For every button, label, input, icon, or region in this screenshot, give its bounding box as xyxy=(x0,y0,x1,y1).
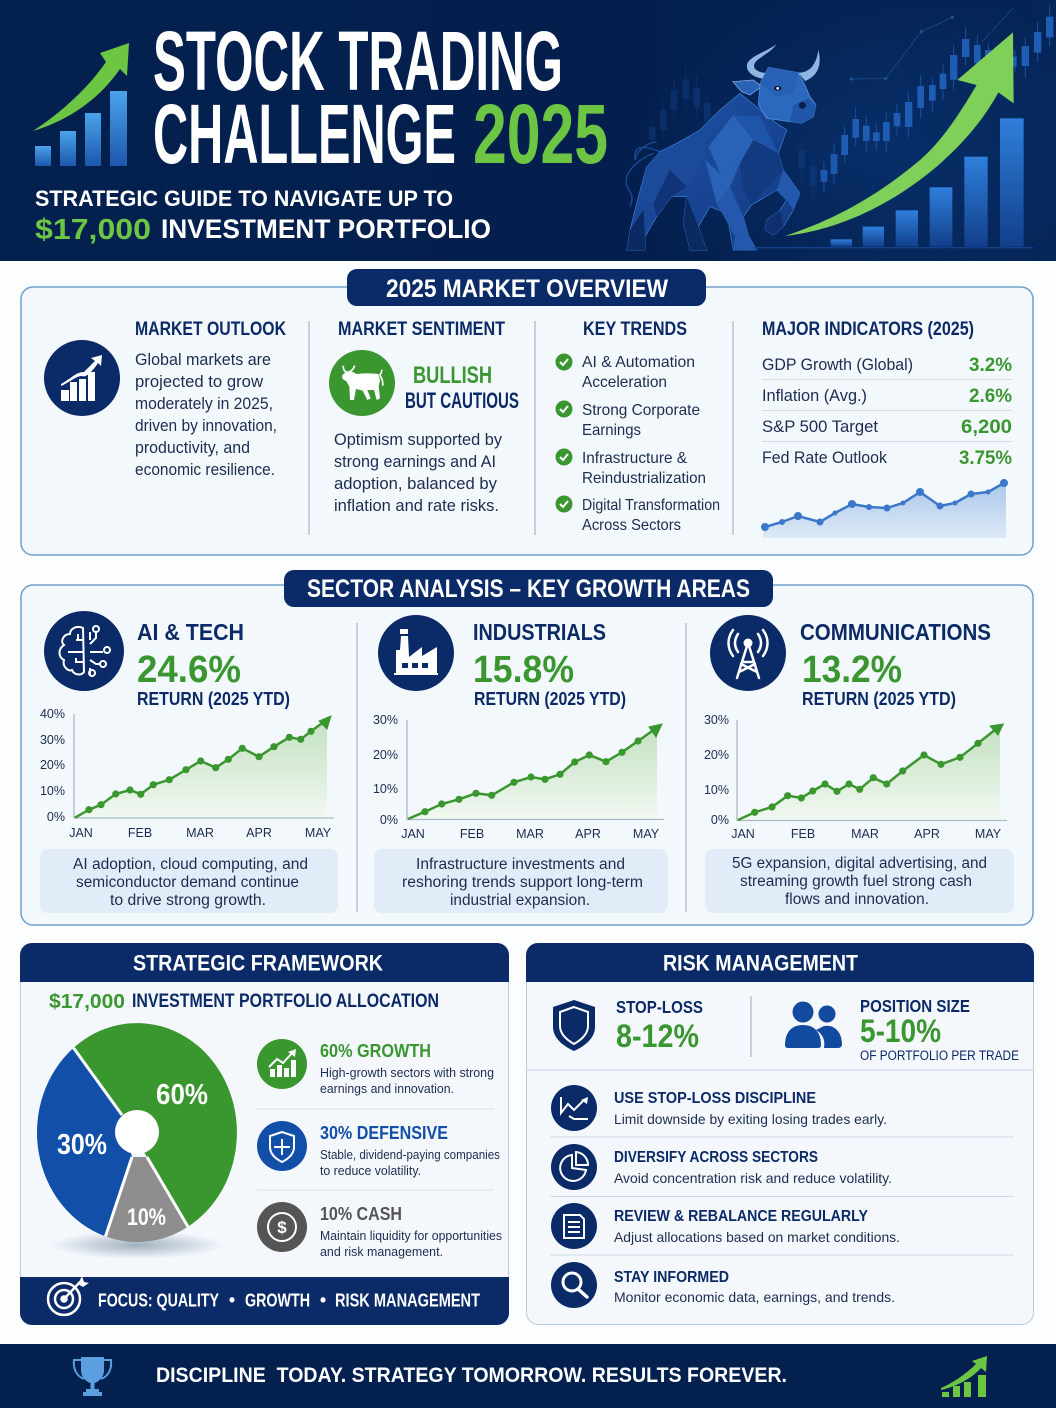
text: market outlook body: projected to grow xyxy=(135,373,263,391)
text: market outlook body: productivity, and xyxy=(135,439,250,457)
note: communications: 5G expansion, digital advertising, and xyxy=(732,855,987,872)
chart: allocation pie: 10% xyxy=(127,1204,166,1231)
chart: communications returns: 0% xyxy=(711,813,729,827)
legend: defensive xyxy=(257,1121,500,1178)
list: key trends checks xyxy=(556,354,572,512)
tip: stay informed: Monitor economic data, earnings, and trends. xyxy=(614,1289,895,1305)
stat: position size: OF PORTFOLIO PER TRADE xyxy=(860,1048,1019,1063)
panel: sector analysis xyxy=(21,570,1033,925)
background candlestick chart xyxy=(649,5,1053,198)
table: indicator rows: GDP Growth (Global) xyxy=(762,355,913,374)
text: market outlook body: driven by innovation, xyxy=(135,417,277,435)
column: key trends xyxy=(556,319,720,534)
sector: industrials: INDUSTRIALS xyxy=(473,619,606,645)
footer banner xyxy=(0,1344,1056,1408)
subheading: portfolio allocation xyxy=(49,991,439,1013)
text: market outlook body: economic resilience. xyxy=(135,461,275,479)
focus bar: RISK MANAGEMENT xyxy=(335,1290,480,1310)
note: communications: flows and innovation. xyxy=(785,891,929,908)
chart: industrials returns: JAN xyxy=(401,827,425,841)
sector: AI and tech xyxy=(40,611,338,913)
column: major indicators xyxy=(761,319,1012,538)
text: market sentiment body: Optimism supported by xyxy=(334,431,503,449)
stat: position size: 5-10% xyxy=(860,1013,941,1049)
sector: industrials: 15.8% xyxy=(473,649,574,691)
icon: signal tower xyxy=(710,615,786,691)
subtitle: STRATEGIC GUIDE TO NAVIGATE UP TO xyxy=(35,186,453,211)
title: STOCK TRADING xyxy=(153,14,563,108)
chart: communications returns: APR xyxy=(914,827,940,841)
chart: communications returns: MAR xyxy=(851,827,879,841)
text: market sentiment body xyxy=(334,431,503,515)
table: indicator rows xyxy=(762,354,1012,469)
slice: cash 10% xyxy=(106,1157,188,1242)
text: market outlook body: moderately in 2025, xyxy=(135,395,273,413)
stat: position size xyxy=(785,996,1019,1063)
tip: diversify across sectors: Avoid concentration risk and reduce volatility. xyxy=(614,1170,892,1186)
column: market sentiment: BUT CAUTIOUS xyxy=(405,388,519,413)
legend: defensive: to reduce volatility. xyxy=(320,1163,421,1178)
sector: communications xyxy=(704,615,1014,913)
text: key trends list: Strong Corporate xyxy=(582,402,700,419)
table: indicator rows: S&P 500 Target xyxy=(762,417,878,436)
text: key trends list: Infrastructure & xyxy=(582,450,687,467)
title: 2025 xyxy=(473,87,608,181)
header banner xyxy=(0,0,1056,261)
text: market outlook body xyxy=(135,351,277,479)
text: key trends list: AI & Automation xyxy=(582,354,695,371)
chart: AI and tech returns: 0% xyxy=(47,810,65,824)
icon: mini growth chart xyxy=(941,1356,987,1397)
subheading: portfolio allocation: $17,000 xyxy=(49,991,125,1013)
chart: industrials returns: FEB xyxy=(460,827,484,841)
column: market sentiment: MARKET SENTIMENT xyxy=(338,319,505,340)
sector: industrials: RETURN (2025 YTD) xyxy=(474,689,626,709)
stat: stop-loss xyxy=(553,997,703,1054)
subheading: portfolio allocation: INVESTMENT PORTFOLIO ALLOCATION xyxy=(132,991,439,1012)
slice: growth 60% xyxy=(74,1023,237,1227)
tip: use stop-loss discipline: USE STOP-LOSS DISCIPLINE xyxy=(614,1090,816,1107)
chart: communications returns xyxy=(704,713,1007,841)
chart: indicator sparkline xyxy=(761,479,1008,538)
chart: AI and tech returns: 20% xyxy=(40,758,65,772)
chart: communications returns: 10% xyxy=(704,783,729,797)
chart: AI and tech returns: MAR xyxy=(186,826,214,840)
text: key trends list: Earnings xyxy=(582,422,641,439)
title: CHALLENGE xyxy=(153,87,456,181)
text: key trends list: Digital Transformation xyxy=(582,497,720,514)
tip: stay informed xyxy=(551,1262,895,1308)
slice: defensive 30% xyxy=(37,1048,132,1236)
icon: magnifier xyxy=(551,1262,597,1308)
chart: communications returns: 30% xyxy=(704,713,729,727)
table: indicator rows: 3.75% xyxy=(959,447,1012,469)
note: industrials xyxy=(374,849,668,913)
text: key trends list: Across Sectors xyxy=(582,517,681,534)
heading tab: sector analysis xyxy=(284,570,773,607)
note: AI and tech: semiconductor demand continue xyxy=(76,874,299,891)
icon: people xyxy=(785,1002,842,1048)
icon: shield xyxy=(553,1000,595,1051)
heading: risk management xyxy=(526,943,1034,982)
heading tab: 2025 market overview: 2025 MARKET OVERVIEW xyxy=(386,275,668,303)
chart: AI and tech returns: 30% xyxy=(40,733,65,747)
icon: dollar coin badge xyxy=(257,1202,307,1252)
note: AI and tech xyxy=(40,849,338,913)
legend: defensive: Stable, dividend-paying companies xyxy=(320,1147,500,1162)
text: key trends list xyxy=(582,354,720,534)
icon: shield plus badge xyxy=(257,1121,307,1171)
column: market outlook: MARKET OUTLOOK xyxy=(135,319,286,340)
heading: risk management: RISK MANAGEMENT xyxy=(663,950,858,976)
tip: diversify across sectors: DIVERSIFY ACROSS SECTORS xyxy=(614,1149,818,1166)
note: industrials: industrial expansion. xyxy=(450,892,590,909)
icon: blue low-poly bull xyxy=(626,44,820,250)
footer banner: DISCIPLINE TODAY. STRATEGY TOMORROW. RESULTS FOREVER. xyxy=(156,1364,787,1387)
icon: pie chart xyxy=(551,1144,597,1190)
table: indicator rows: 3.2% xyxy=(969,354,1012,376)
chart: AI and tech returns: FEB xyxy=(128,826,152,840)
tip: review and rebalance xyxy=(551,1203,900,1249)
sector: AI and tech: 24.6% xyxy=(137,649,241,691)
tip: use stop-loss discipline: Limit downside by exiting losing trades early. xyxy=(614,1111,887,1127)
chart: industrials returns: 20% xyxy=(373,748,398,762)
sector: communications: RETURN (2025 YTD) xyxy=(802,689,956,709)
heading: strategic framework xyxy=(20,943,509,982)
stat: stop-loss: 8-12% xyxy=(616,1018,699,1054)
chart: AI and tech returns: APR xyxy=(246,826,272,840)
focus bar: FOCUS: QUALITY xyxy=(98,1290,219,1310)
chart: AI and tech returns: 40% xyxy=(40,707,65,721)
chart: AI and tech returns: JAN xyxy=(69,826,93,840)
chart: allocation pie: 30% xyxy=(57,1129,107,1161)
note: communications: streaming growth fuel strong cash xyxy=(740,873,972,890)
focus bar xyxy=(20,1276,509,1325)
chart: allocation pie xyxy=(37,1023,237,1259)
text: key trends list: Acceleration xyxy=(582,374,667,391)
note: AI and tech: AI adoption, cloud computing, and xyxy=(73,856,308,873)
title xyxy=(153,14,608,181)
sector: AI and tech: RETURN (2025 YTD) xyxy=(137,689,290,709)
icon: bull badge xyxy=(329,350,395,416)
chart: communications returns: MAY xyxy=(975,827,1002,841)
text: market sentiment body: inflation and rate risks. xyxy=(334,497,499,515)
legend: growth xyxy=(257,1039,494,1096)
sector: industrials xyxy=(373,615,668,913)
chart: industrials returns: MAY xyxy=(633,827,660,841)
chart: industrials returns: 30% xyxy=(373,713,398,727)
column: key trends: KEY TRENDS xyxy=(583,319,687,340)
chart: industrials returns: MAR xyxy=(516,827,544,841)
icon: factory xyxy=(378,615,454,691)
chart: communications returns: JAN xyxy=(731,827,755,841)
chart: industrials returns: 0% xyxy=(380,813,398,827)
chart: industrials returns: 10% xyxy=(373,782,398,796)
column: market outlook xyxy=(44,319,286,479)
subtitle: INVESTMENT PORTFOLIO xyxy=(161,214,491,244)
column: market sentiment xyxy=(329,319,519,515)
icon: large green growth arrow with bars xyxy=(753,32,1033,248)
note: industrials: Infrastructure investments and xyxy=(416,856,625,873)
heading: strategic framework: STRATEGIC FRAMEWORK xyxy=(133,950,383,976)
icon: target xyxy=(48,1276,89,1315)
legend: growth: earnings and innovation. xyxy=(320,1081,454,1096)
tip: review and rebalance: REVIEW & REBALANCE REGULARLY xyxy=(614,1208,868,1225)
icon: line chart xyxy=(551,1085,597,1131)
note: AI and tech: to drive strong growth. xyxy=(110,892,266,909)
text: key trends list: Reindustrialization xyxy=(582,470,706,487)
legend: growth: 60% GROWTH xyxy=(320,1041,431,1061)
tip: stay informed: STAY INFORMED xyxy=(614,1269,729,1286)
icon: dollar coin badge: $ xyxy=(277,1218,287,1237)
subtitle xyxy=(35,186,491,246)
legend: cash xyxy=(257,1202,502,1259)
icon: circuit brain xyxy=(44,611,124,691)
heading tab: 2025 market overview xyxy=(347,269,706,306)
sector: communications: COMMUNICATIONS xyxy=(800,619,991,645)
icon: document xyxy=(551,1203,597,1249)
column: major indicators: MAJOR INDICATORS (2025) xyxy=(762,319,974,340)
legend: growth: High-growth sectors with strong xyxy=(320,1065,494,1080)
chart: communications returns: 20% xyxy=(704,748,729,762)
note: industrials: reshoring trends support long-term xyxy=(402,874,643,891)
legend: cash: 10% CASH xyxy=(320,1204,402,1224)
chart: industrials returns xyxy=(373,713,664,841)
text: market sentiment body: strong earnings and AI xyxy=(334,453,496,471)
panel: 2025 market overview xyxy=(21,269,1033,555)
stat: stop-loss: STOP-LOSS xyxy=(616,997,703,1017)
chart: AI and tech returns xyxy=(40,707,334,840)
legend: cash: Maintain liquidity for opportunities xyxy=(320,1228,502,1243)
chart: communications returns: FEB xyxy=(791,827,815,841)
subtitle: $17,000 xyxy=(35,214,151,246)
tip: review and rebalance: Adjust allocations based on market conditions. xyxy=(614,1229,900,1245)
focus bar: GROWTH xyxy=(245,1290,310,1310)
focus bar: • xyxy=(229,1290,235,1310)
table: indicator rows: 6,200 xyxy=(961,416,1012,438)
tip: use stop-loss discipline xyxy=(551,1085,887,1131)
sector: AI and tech: AI & TECH xyxy=(137,619,244,645)
icon: header bar chart with green arrow xyxy=(33,43,129,166)
sector: communications: 13.2% xyxy=(802,649,902,691)
chart: allocation pie: 60% xyxy=(156,1079,208,1111)
text: market sentiment body: adoption, balanced by xyxy=(334,475,498,493)
table: indicator rows: Fed Rate Outlook xyxy=(762,448,887,467)
chart: AI and tech returns: MAY xyxy=(305,826,332,840)
note: communications xyxy=(705,849,1014,913)
stat: position size: POSITION SIZE xyxy=(860,996,970,1016)
heading tab: sector analysis: SECTOR ANALYSIS – KEY GROWTH AREAS xyxy=(307,575,750,603)
icon: trophy xyxy=(74,1357,111,1396)
panel: risk management xyxy=(526,943,1034,1324)
chart: AI and tech returns: 10% xyxy=(40,784,65,798)
text: market outlook body: Global markets are xyxy=(135,351,271,369)
focus bar: • xyxy=(320,1290,326,1310)
legend: cash: and risk management. xyxy=(320,1244,443,1259)
column: market sentiment: BULLISH xyxy=(413,362,492,389)
table: indicator rows: 2.6% xyxy=(969,385,1012,407)
panel: strategic framework xyxy=(20,943,509,1325)
table: indicator rows: Inflation (Avg.) xyxy=(762,386,867,405)
icon: growth chart badge xyxy=(257,1039,307,1089)
icon: growth chart xyxy=(44,340,120,416)
tip: diversify across sectors xyxy=(551,1144,892,1190)
chart: industrials returns: APR xyxy=(575,827,601,841)
legend: defensive: 30% DEFENSIVE xyxy=(320,1123,448,1143)
